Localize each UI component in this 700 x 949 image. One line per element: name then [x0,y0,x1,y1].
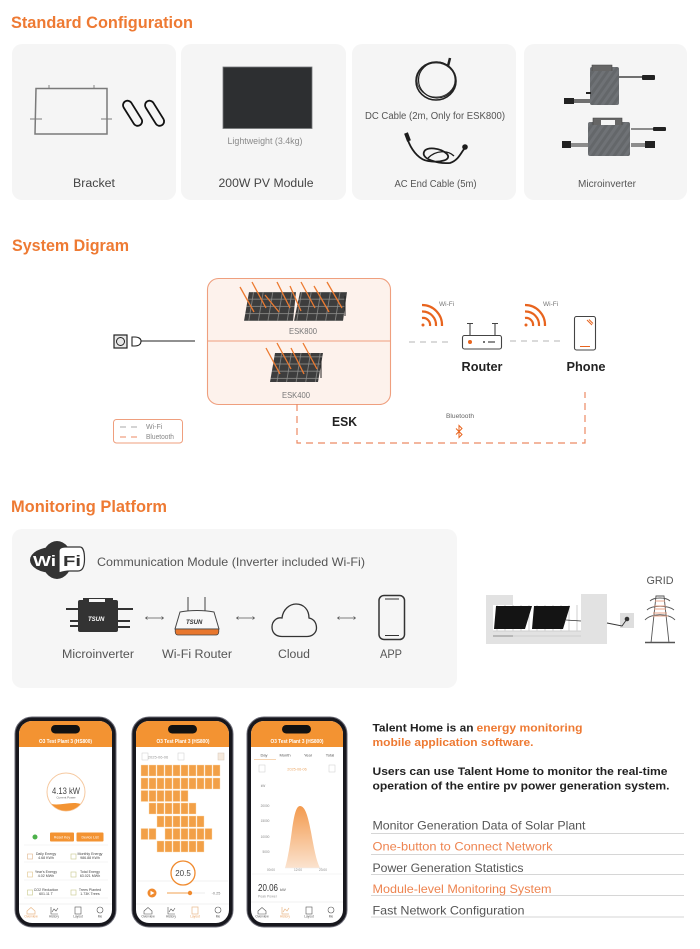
tab bar: Overview [24,914,38,918]
label: Bracket: Bracket [73,178,116,190]
peak power [252,874,342,898]
area chart [261,784,327,872]
title: Monitoring Platform: Monitoring Platform [11,498,167,516]
icon: AC cable [406,133,468,163]
tab bar: Layout [304,914,314,918]
connector: wifi dashed lines [409,341,565,342]
panel: PV module [181,44,346,200]
icon: wall socket [620,613,634,628]
label: Wi-Fi left: Wi-Fi [439,301,454,308]
stat tiles: Trees Planted [79,888,101,892]
label: GRID: GRID [646,575,674,587]
feature list: Power Generation Statistics [372,861,524,875]
icon: WiFi logo [30,541,84,579]
label: ESK400: ESK400 [282,390,310,400]
icon: DC cable [416,58,456,100]
icon: WiFi logo: Wi [33,553,56,570]
text block: description: operation of the entire pv power generation system. [372,780,670,792]
label: 200W PV Module: 200W PV Module [218,178,314,190]
icon: Wi-Fi router: TSUN [186,620,203,626]
phone: overview screen [15,717,116,927]
tab bar: Overview [141,914,155,918]
label: Phone: Phone [566,359,606,374]
icon: ESK800 solar panels [240,282,347,321]
title: Standard Configuration: Standard Configuration [11,13,193,32]
tab bar: Layout [190,914,200,918]
icon: bluetooth [456,426,462,438]
icon: app phone [379,596,404,640]
panel: communication module [12,529,457,688]
stat tiles: 1.73K Trees [80,892,100,896]
phone: layout screen: O3 Test Plant 3 (HS800) [156,739,210,745]
period tabs: Year [304,752,313,758]
feature list [371,818,684,918]
feature list: Monitor Generation Data of Solar Plant [372,818,586,832]
icon: cloud [272,604,316,636]
note: lightweight: Lightweight (3.4kg) [228,136,302,146]
connector: bluetooth dashed line [297,392,585,443]
icon: small microinverter [564,65,655,105]
tab bar [251,902,343,918]
diagram: system [114,278,606,443]
period tabs: Month [279,752,291,758]
label: Wi-Fi Router: Wi-Fi Router [162,649,232,661]
title: System Digram: System Digram [12,237,129,255]
text block: description: Users can use Talent Home to monitor the real-time [372,766,668,778]
icon: microinverter [66,598,133,632]
icon: WiFi logo: Fi [63,553,81,570]
feature list: Module-level Monitoring System [372,882,552,896]
header [136,721,229,747]
arrow: cloud to app [338,616,356,620]
icon: wifi signal left [422,305,442,326]
label: Bluetooth: Bluetooth [446,413,474,420]
peak power: 20.06 [258,883,278,894]
tab bar [136,904,229,918]
text block: intro [372,722,582,749]
period tabs [254,752,334,760]
stat tiles: 601.11 T [39,892,54,896]
status dot [32,834,38,840]
tab bar: Me [329,914,333,918]
icon: phone outline [574,316,596,350]
playback slider: -0.25 [212,892,220,896]
stat tiles: 986.88 KWh [80,856,100,860]
icon: microinverter: TSUN [88,617,105,623]
stat tiles: 4.68 KWh [38,856,54,860]
panel: bracket [12,44,176,200]
label: AC cable: AC End Cable (5m) [394,179,476,190]
stat tiles: 4.02 MWh [38,874,54,878]
arrow: microinverter to router [146,616,164,620]
legend: Wi-Fi [146,424,163,431]
stat tiles: Monthly Energy [78,852,103,856]
phone: history screen: O3 Test Plant 3 (HS800) [270,739,324,745]
phone: overview screen: O3 Test Plant 3 (HS800) [39,739,92,745]
area chart: kW [261,784,265,788]
stat tiles: CO2 Reduction [34,888,58,892]
icon: ESK400 solar panels [266,343,323,382]
tab bar: Overview [255,914,269,918]
area chart: 5000 [262,850,270,854]
date selector [259,765,335,772]
icon: cable straps [121,99,166,128]
label: Wi-Fi right: Wi-Fi [543,301,558,308]
buttons: Reset Key [54,836,70,840]
label: Microinverter: Microinverter [578,179,637,190]
phone: layout screen [132,717,233,927]
period tabs: Total [326,752,334,758]
label: Router: Router [462,359,502,374]
icon: wifi signal right [524,305,545,326]
text block: intro: Talent Home is an [372,722,474,734]
gauge: 20.5 [137,861,228,885]
date selector: 2025-06-06 [287,768,307,772]
feature list: Fast Network Configuration [372,904,524,918]
period tabs: Day [260,752,268,758]
tab bar: Me [216,914,220,918]
phone: history screen [247,717,347,927]
label: APP: APP [380,649,402,661]
text block: description [372,766,670,792]
icon: Wi-Fi router [175,597,219,635]
stat tiles [24,845,108,898]
feature list: One-button to Connect Network [372,840,554,854]
panel: ESK box [208,278,390,404]
gauge: current power [47,773,85,811]
area chart: 15000 [261,819,270,823]
icon: PV module [223,67,312,128]
tab bar: History [49,914,59,918]
stat tiles: Total Energy [80,870,100,874]
stat tiles: 63.021 MWh [80,874,100,878]
peak power: Peak Power [258,894,278,898]
date selector: 2025-06-06 [148,754,169,760]
label: ESK800: ESK800 [289,326,317,336]
legend: Bluetooth [146,434,174,441]
header [251,721,343,747]
stat tiles: Daily Energy [36,852,56,856]
area chart: 10000 [261,835,270,839]
text block: intro: mobile application software. [372,737,534,749]
area chart: 23:00 [319,868,327,872]
area chart: 00:00 [267,868,275,872]
icon: transmission tower [645,596,675,643]
label: Communication Module: Communication Module (Inverter included Wi-Fi) [97,555,365,569]
label: Microinverter: Microinverter [62,649,134,661]
buttons [50,832,104,842]
label: Cloud: Cloud [278,649,310,661]
panel: cables [352,44,516,200]
icon: router [462,323,502,349]
gauge: current power: 4.13 kW [52,786,80,796]
icon: socket and plug with cable [114,335,195,348]
area chart: 20000 [261,804,270,808]
icon: bracket frame [30,85,112,134]
label: ESK: ESK [332,414,358,429]
tab bar: Me [98,914,102,918]
header [19,721,112,747]
tab bar: History [166,914,176,918]
tab bar: Layout [73,914,83,918]
area chart: 12:00 [294,868,302,872]
gauge: 20.5: 20.5 [175,869,191,878]
stat tiles: Year's Energy [35,870,57,874]
text block: intro: energy monitoring [476,722,582,734]
module layout grid [141,765,220,852]
arrow: router to cloud [236,616,254,620]
icon: large microinverter [562,118,666,156]
tab bar [19,904,112,918]
playback slider [148,888,220,898]
label: DC cable: DC Cable (2m, Only for ESK800) [365,111,505,122]
buttons: Device List [81,836,99,840]
panel: microinverter [524,44,687,200]
legend [114,420,182,443]
gauge: current power: Current Power [56,796,76,800]
peak power: kW [280,887,286,892]
illustration: balcony with solar panels [486,594,634,644]
date selector [142,753,224,760]
tab bar: History [280,914,290,918]
